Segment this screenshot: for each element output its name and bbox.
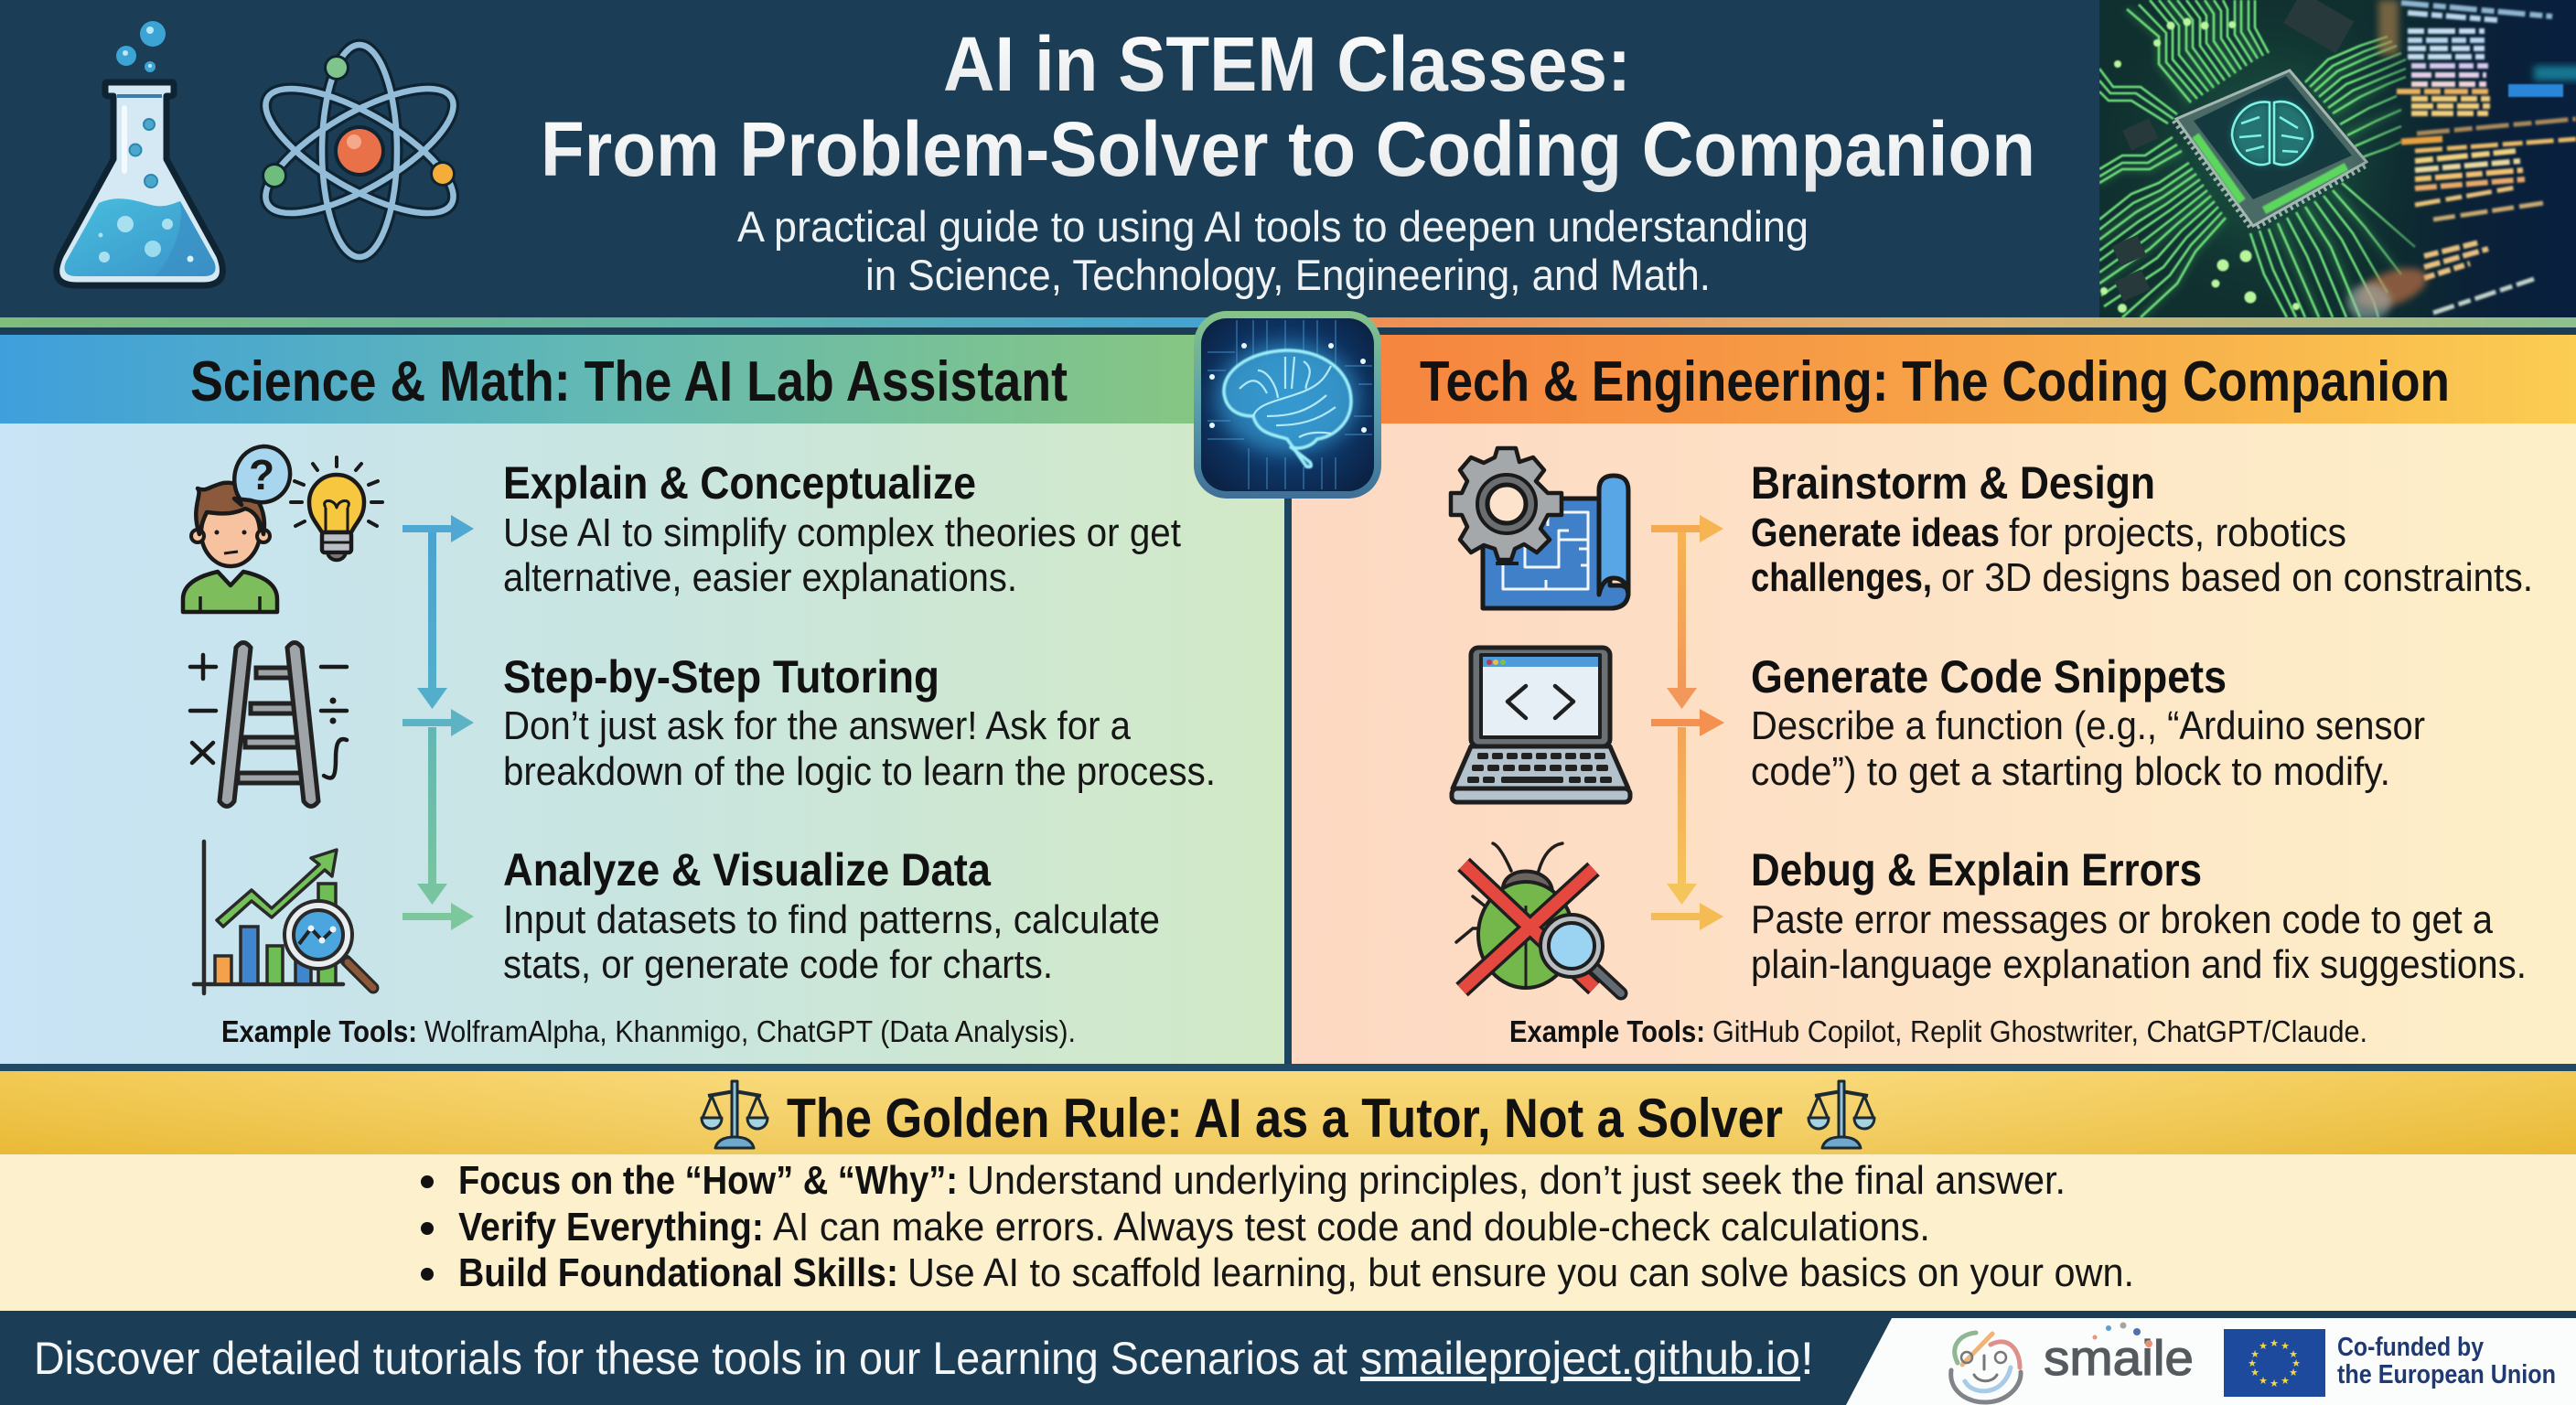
arrow: connector to item 1	[402, 515, 474, 709]
bullet: build skills	[421, 1250, 2134, 1295]
text: brainstorm and design: or 3D designs based on constraints.	[1941, 555, 2533, 600]
panel: golden rule	[0, 1071, 2576, 1311]
text: brainstorm and design: Brainstorm & Design	[1751, 457, 2155, 509]
bullet: focus: Focus on the “How” & “Why”:	[458, 1158, 958, 1203]
text: debug and explain errors: Debug & Explain Errors	[1751, 844, 2202, 896]
section header: science and math	[0, 335, 1284, 424]
subtitle	[737, 202, 1809, 299]
arrow: connector to item 2	[402, 709, 474, 905]
text: generate code snippets	[1751, 651, 2425, 794]
text: explain and conceptualize: alternative, easier explanations.	[503, 555, 1017, 600]
section header: science and math: Science & Math: The AI Lab Assistant	[190, 350, 1068, 413]
arrow: connector to item 3	[402, 903, 474, 930]
panel: tech and engineering	[1292, 335, 2576, 1064]
icon: student with question and lightbulb	[183, 446, 382, 612]
text: brainstorm and design: Generate ideas	[1751, 510, 2000, 555]
example tools left: Example Tools:	[221, 1014, 417, 1048]
text: brainstorm and design: for projects, robotics	[2009, 510, 2346, 555]
icon: scales left	[702, 1081, 767, 1148]
icon: data chart with magnifier	[194, 842, 373, 993]
text: step-by-step tutoring: breakdown of the logic to learn the process.	[503, 749, 1216, 794]
icon: laptop with code brackets	[1452, 648, 1630, 802]
logo: EU flag: ★	[2259, 1376, 2268, 1387]
bullet: verify: Verify Everything:	[458, 1205, 764, 1249]
bullet: build skills: Build Foundational Skills:	[458, 1250, 898, 1295]
logo: EU flag: ★	[2250, 1367, 2259, 1378]
logo: EU flag: ★	[2250, 1349, 2259, 1360]
text: explain and conceptualize: Explain & Conceptualize	[503, 457, 976, 509]
bullet: focus	[421, 1158, 2066, 1203]
footer call to action: !	[1800, 1333, 1814, 1384]
header background	[0, 0, 2576, 335]
text: analyze and visualize data: Input datasets to find patterns, calculate	[503, 897, 1160, 942]
heading: golden rule	[0, 1071, 2576, 1154]
example tools left: WolframAlpha, Khanmigo, ChatGPT (Data Analysis).	[424, 1014, 1076, 1048]
text: analyze and visualize data: stats, or generate code for charts.	[503, 942, 1053, 987]
icon: glowing brain badge	[1194, 311, 1381, 499]
text: analyze and visualize data: Analyze & Visualize Data	[503, 844, 992, 896]
text: debug and explain errors: plain-language explanation and fix suggestions.	[1751, 942, 2527, 987]
icon: scales right	[1809, 1081, 1874, 1148]
logo panel	[1846, 1318, 2576, 1405]
logo: smaile: smaile	[2044, 1331, 2194, 1386]
image: circuit board and code	[2086, 0, 2576, 325]
section header: tech and engineering	[1292, 335, 2576, 424]
logo: EU flag: ★	[2281, 1376, 2290, 1387]
icon: ladder with math symbols	[190, 642, 347, 807]
bullet: build skills: Use AI to scaffold learning, but ensure you can solve basics on your own.	[907, 1250, 2134, 1295]
icon: bug crossed out with magnifier	[1456, 843, 1621, 993]
arrow: connector to item 1	[1651, 515, 1723, 709]
logo: EU flag: ★	[2270, 1378, 2279, 1389]
icon: flask	[57, 21, 222, 285]
subtitle: A practical guide to using AI tools to deepen understanding	[737, 202, 1809, 251]
gradient strip	[0, 317, 2576, 327]
logo: EU flag: ★	[2289, 1349, 2298, 1360]
logo: EU flag	[2224, 1329, 2325, 1397]
logo: EU flag: ★	[2281, 1341, 2290, 1352]
logo: smaile	[1951, 1323, 2194, 1402]
logo: EU flag: ★	[2248, 1358, 2257, 1369]
text: brainstorm and design	[1751, 457, 2533, 600]
arrow: connector to item 2	[1651, 709, 1724, 905]
text: generate code snippets: code”) to get a starting block to modify.	[1751, 749, 2390, 794]
chip	[2176, 119, 2367, 226]
logo: EU flag: ★	[2270, 1338, 2279, 1349]
text: explain and conceptualize	[503, 457, 1181, 600]
text: debug and explain errors: Paste error messages or broken code to get a	[1751, 897, 2493, 942]
text: brainstorm and design: challenges,	[1751, 555, 1932, 600]
logo: EU flag: ★	[2259, 1341, 2268, 1352]
text: step-by-step tutoring: Step-by-Step Tutoring	[503, 651, 939, 702]
subtitle: in Science, Technology, Engineering, and Math.	[865, 251, 1711, 299]
icon: gear and blueprint	[1451, 448, 1628, 608]
text: generate code snippets: Describe a function (e.g., “Arduino sensor	[1751, 703, 2425, 748]
heading: golden rule: The Golden Rule: AI as a Tutor, Not a Solver	[787, 1088, 1783, 1149]
band: golden rule divider	[0, 1064, 2576, 1071]
example tools right: GitHub Copilot, Replit Ghostwriter, ChatGPT/Claude.	[1712, 1014, 2367, 1048]
panel: science and math	[0, 335, 1284, 1064]
text: step-by-step tutoring	[503, 651, 1216, 794]
title: AI in STEM Classes:	[943, 21, 1631, 107]
center divider	[1284, 424, 1292, 1071]
title: From Problem-Solver to Coding Companion	[541, 106, 2035, 192]
footer call to action: Discover detailed tutorials for these tools in our Learning Scenarios at	[34, 1333, 1347, 1384]
example tools right: Example Tools:	[1509, 1014, 1705, 1048]
code panel	[2351, 0, 2576, 317]
logo: EU flag: ★	[2289, 1367, 2298, 1378]
text: step-by-step tutoring: Don’t just ask for the answer! Ask for a	[503, 703, 1131, 748]
text: co-funded: Co-funded by	[2337, 1333, 2484, 1362]
title	[541, 21, 2035, 192]
text: analyze and visualize data	[503, 844, 1160, 987]
text: generate code snippets: Generate Code Snippets	[1751, 651, 2227, 702]
footer	[0, 1311, 2576, 1405]
logo: EU flag: ★	[2292, 1358, 2301, 1369]
text: debug and explain errors	[1751, 844, 2527, 987]
icon: atom	[249, 45, 470, 257]
bullet: focus: Understand underlying principles, don’t just seek the final answer.	[967, 1158, 2066, 1203]
bullet: verify: AI can make errors. Always test code and double-check calculations.	[773, 1205, 1930, 1249]
arrow: connector to item 3	[1651, 903, 1723, 930]
footer call to action: smaileproject.github.io	[1360, 1333, 1800, 1384]
text: co-funded	[2337, 1333, 2556, 1389]
text: explain and conceptualize: Use AI to simplify complex theories or get	[503, 510, 1181, 555]
icon: student with question and lightbulb: ?	[249, 451, 274, 499]
